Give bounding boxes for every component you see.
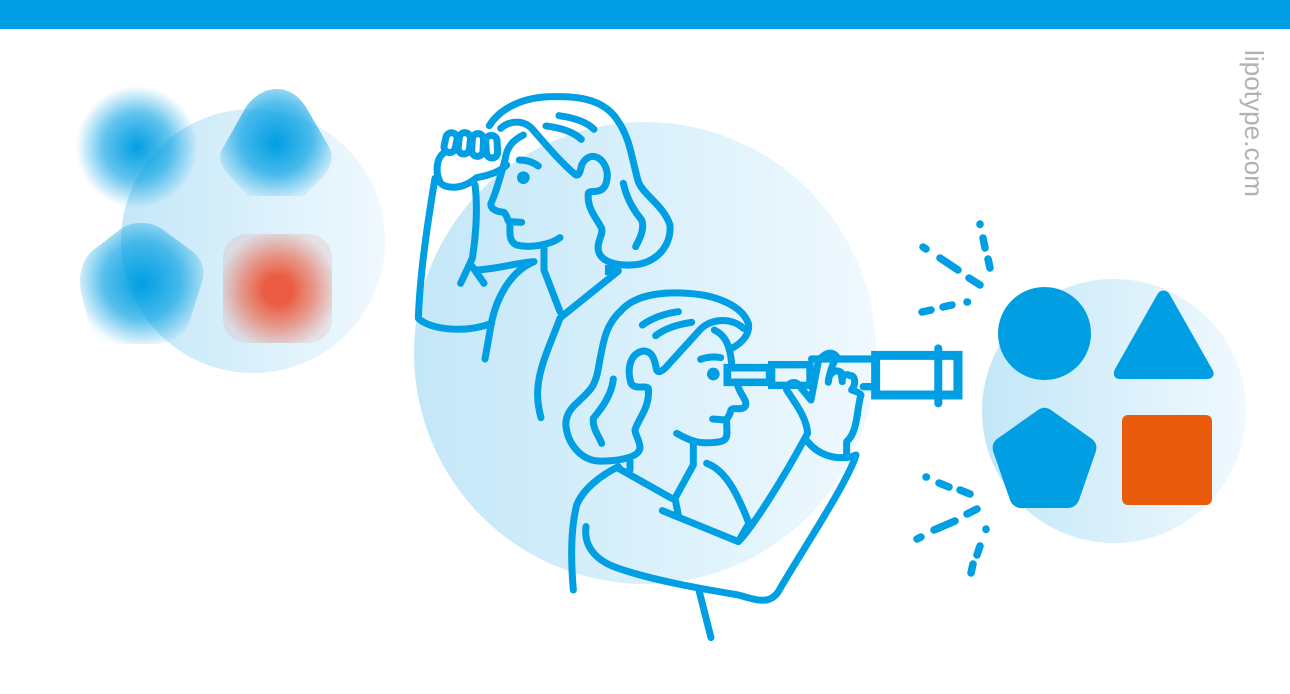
telescope [727,348,958,403]
person with hand shading eyes [418,97,670,418]
blurred triangle [220,89,332,196]
left disc [121,109,385,373]
hair [489,97,670,265]
blurred red square [223,234,332,343]
eye [517,171,530,184]
pentagon [993,408,1096,508]
face [491,135,560,246]
hand [787,353,861,453]
signal dashes lower [917,477,986,573]
eye [707,368,720,380]
hair [566,293,749,461]
website label: lipotype.com [1239,50,1269,197]
blurred pentagon [80,223,204,344]
neck and collar [538,248,618,418]
orange square [1122,415,1212,505]
raised arm [418,178,534,359]
central disc [414,122,876,584]
eyebrow and hair strands [519,116,643,247]
fist fingers [443,132,498,158]
wrist [437,153,507,187]
person looking through telescope [566,293,958,638]
circle [998,287,1091,380]
blurred circle [76,86,198,208]
collar fill [605,265,621,275]
top bar [0,0,1290,29]
hair strands and eyebrow [593,312,732,443]
body and arm [572,390,856,638]
sharp shapes group [993,287,1214,508]
neck and collar [618,435,807,542]
blurred shapes group [76,86,332,344]
signal dashes upper [922,224,990,312]
face [677,386,746,443]
right disc [982,279,1246,543]
triangle [1114,290,1214,379]
